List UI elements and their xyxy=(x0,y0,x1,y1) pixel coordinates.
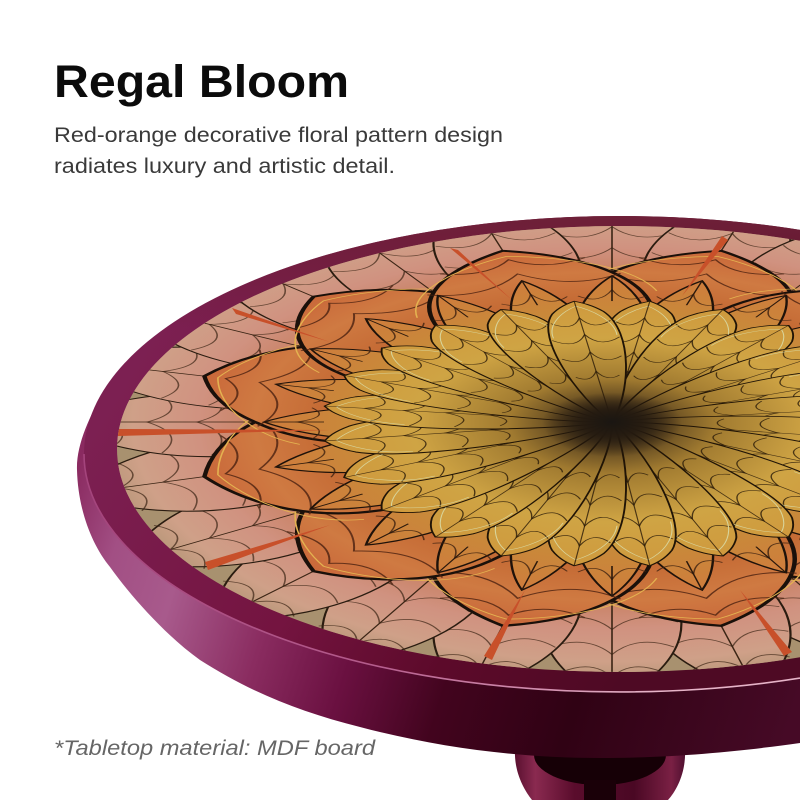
red-orange accent rays xyxy=(118,236,792,660)
rim side wall xyxy=(77,392,800,758)
rim top surface xyxy=(84,216,800,692)
description text xyxy=(54,124,503,178)
footnote: *Tabletop material: MDF board xyxy=(54,737,376,760)
table: rim and decorative top xyxy=(76,216,800,758)
rim highlight line xyxy=(84,454,800,692)
table pedestal xyxy=(515,725,685,800)
description text: radiates luxury and artistic detail. xyxy=(54,155,395,178)
title: Regal Bloom xyxy=(54,56,349,107)
description text: Red-orange decorative floral pattern design xyxy=(54,124,503,147)
floral artwork xyxy=(117,226,800,672)
